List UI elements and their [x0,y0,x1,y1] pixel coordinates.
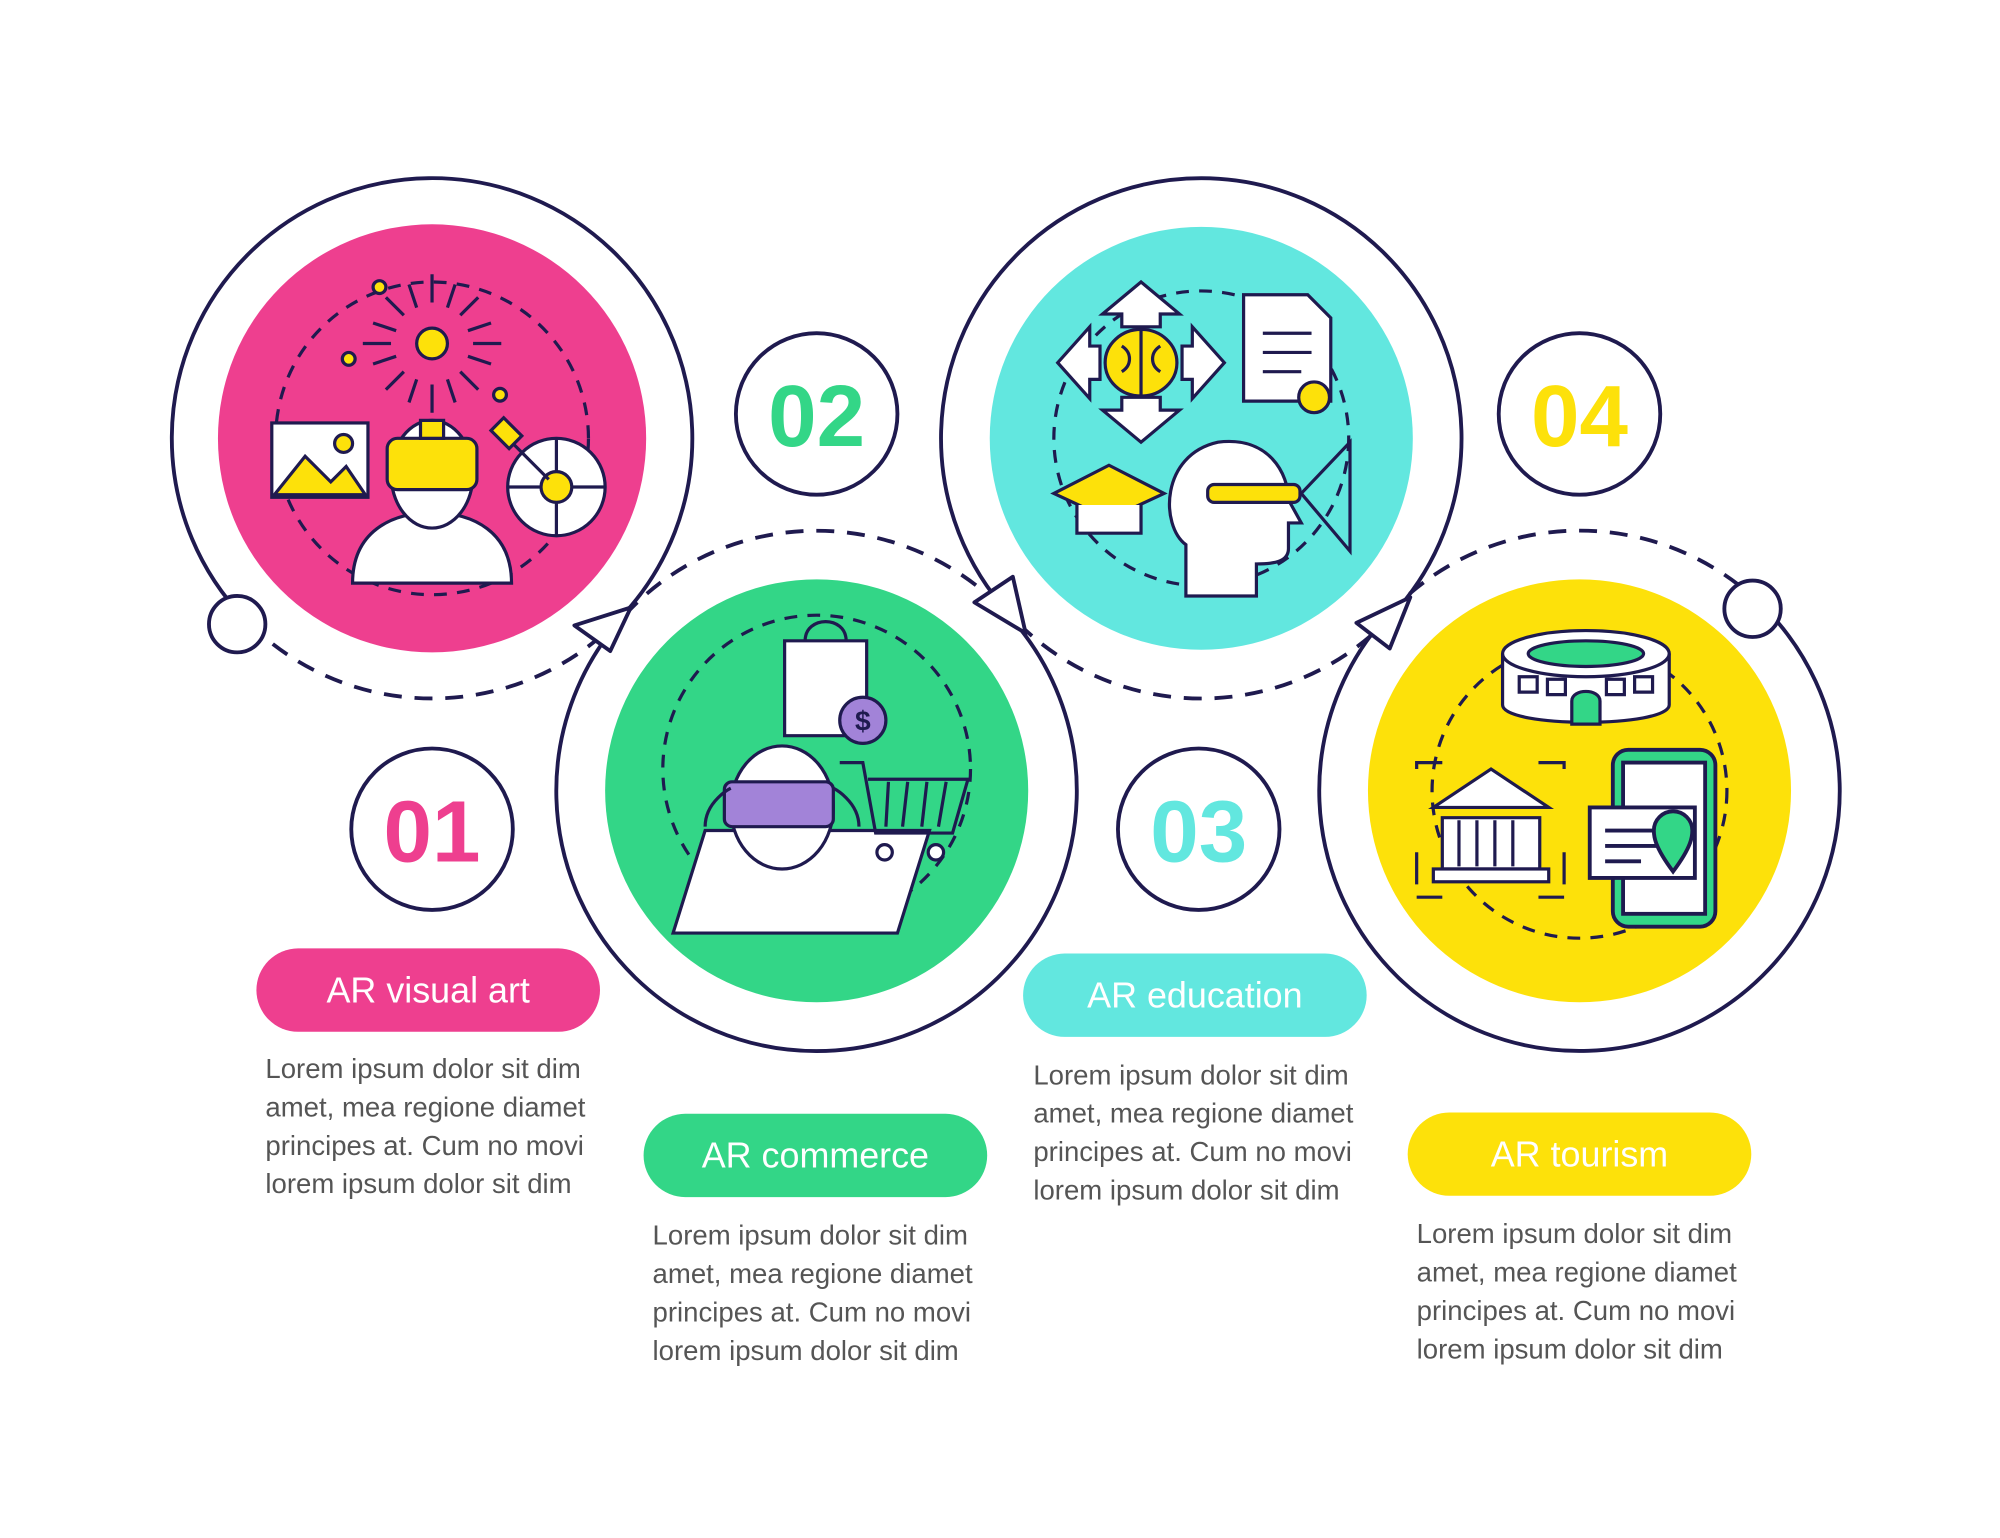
text block 3: amet, mea regione diamet [1033,1098,1354,1129]
number badge 01: 01 [384,783,481,880]
text block 3 [1033,1059,1354,1206]
text block 1 [265,1053,586,1199]
label pill: AR education [1023,954,1367,1037]
icon: phone with map pin [1590,750,1715,927]
flow ring 1 [172,178,692,698]
text block 2: principes at. Cum no movi [653,1296,971,1327]
arrow 3 to 4 [1356,597,1410,649]
text block 1: amet, mea regione diamet [265,1091,586,1122]
text block 1: principes at. Cum no movi [265,1130,584,1161]
text block 2: Lorem ipsum dolor sit dim [653,1220,968,1250]
text block 3: Lorem ipsum dolor sit dim [1033,1059,1349,1090]
start node circle [209,596,265,652]
text block 2: lorem ipsum dolor sit dim [653,1335,959,1366]
label pill: AR commerce [644,1114,987,1197]
panel 3: AR education circle [990,227,1413,650]
label pill: AR commerce: AR commerce [702,1136,929,1176]
flow ring 3 [941,178,1462,698]
label pill: AR tourism: AR tourism [1491,1134,1668,1174]
label pill: AR education: AR education [1087,975,1303,1015]
icon: brain with arrows [1058,282,1224,442]
label pill: AR tourism [1408,1112,1751,1196]
icon: shopping bag: $ [855,705,871,737]
number badge 03: 03 [1150,783,1247,880]
text block 1: lorem ipsum dolor sit dim [265,1168,572,1199]
number badge 02: 02 [768,368,865,465]
number badge 01 [351,748,513,910]
icon: certificate [1244,295,1331,413]
text block 2: amet, mea regione diamet [653,1258,973,1289]
icon: head with glasses [1169,441,1350,596]
icon: shopping bag [785,622,886,743]
number badge 02 [736,333,897,495]
icon: cart [840,763,968,860]
icon: graduation cap [1054,465,1164,533]
text block 4: amet, mea regione diamet [1417,1257,1737,1288]
text block 3: lorem ipsum dolor sit dim [1033,1175,1340,1206]
arrow 2 to 3 [974,577,1026,633]
panel 2: AR commerce circle [605,579,1028,1002]
end node circle [1724,581,1781,637]
text block 4: principes at. Cum no movi [1417,1295,1735,1326]
label pill: AR visual art: AR visual art [327,970,530,1010]
number badge 04: 04 [1531,368,1628,465]
icon: person with phone [673,746,929,933]
icon: colosseum [1503,631,1669,724]
text block 1: Lorem ipsum dolor sit dim [265,1053,581,1084]
text block 4: Lorem ipsum dolor sit dim [1417,1218,1732,1249]
icon: VR person [353,420,512,583]
text block 2 [653,1220,973,1366]
flow ring 4 [1319,531,1840,1051]
text block 3: principes at. Cum no movi [1033,1136,1352,1167]
panel 4: AR tourism circle [1368,579,1791,1002]
icon: picture [272,423,368,497]
text block 4: lorem ipsum dolor sit dim [1417,1334,1723,1365]
panel 1: AR visual art circle [218,224,646,652]
number badge 04 [1499,333,1660,495]
text block 4 [1417,1218,1737,1365]
arrow 1 to 2 [574,608,631,651]
icon: fireworks [342,274,506,413]
label pill: AR visual art [256,948,600,1032]
icon: color wheel [491,418,605,536]
icon: museum [1417,763,1564,897]
number badge 03 [1118,748,1279,910]
flow ring 2 [556,531,1077,1051]
